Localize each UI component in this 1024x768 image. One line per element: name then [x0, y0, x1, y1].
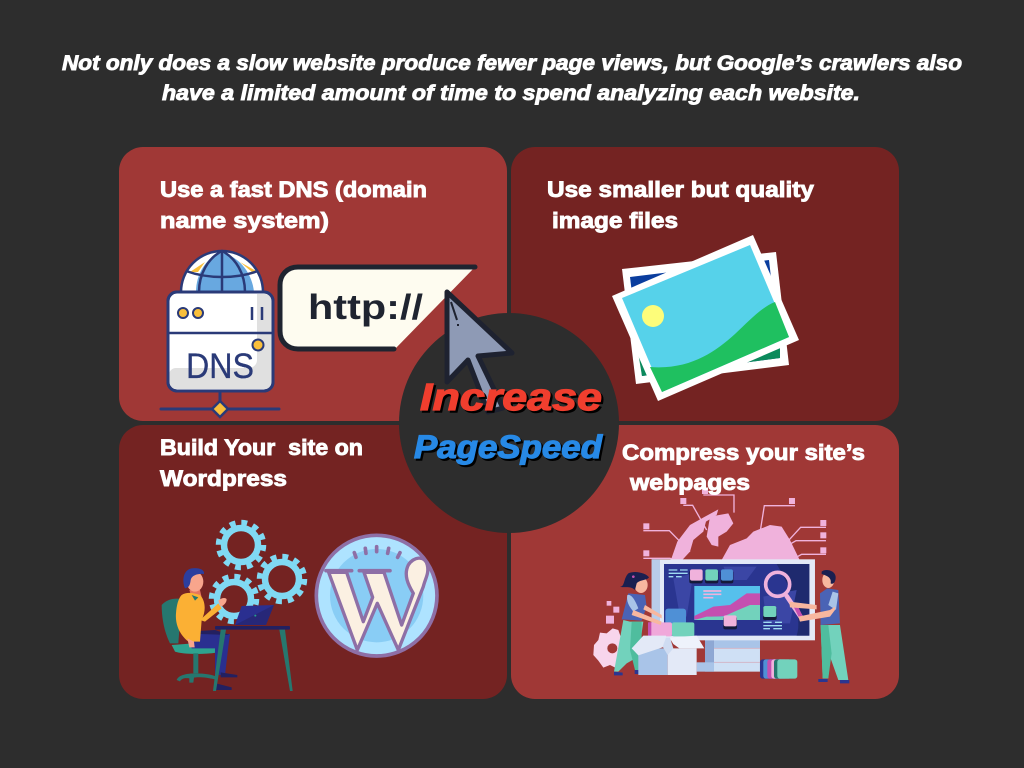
panel: image files [511, 147, 899, 421]
heading: image files: image files [552, 208, 678, 233]
heading: compress webpages [622, 440, 865, 495]
heading: image files [547, 177, 815, 233]
center badge [399, 292, 619, 533]
icon: stacked photos [612, 235, 799, 401]
label: Increase: Increase [420, 377, 602, 419]
label: PageSpeed: PageSpeed [416, 431, 606, 467]
heading: compress webpages: Compress your site’s [622, 440, 865, 465]
heading: Wordpress: Build Your site on [160, 435, 363, 460]
heading: Wordpress [160, 435, 363, 491]
label: PageSpeed: PageSpeed [414, 429, 604, 465]
heading: image files: Use smaller but quality [547, 177, 815, 202]
panel: Wordpress [119, 425, 507, 699]
panel: compress webpages [511, 425, 899, 699]
heading: fast DNS: Use a fast DNS (domain [160, 177, 427, 202]
heading: fast DNS [160, 177, 427, 233]
icon: http address bubble: http:// [308, 288, 423, 327]
header text: Not only does a slow website produce fewer page views, but Google’s crawlers also [62, 52, 962, 75]
icon: gears [212, 522, 304, 622]
icon: DNS server with globe: DNS [186, 347, 254, 386]
illustration: monitor, globe and two people [593, 488, 849, 683]
icon: cursor arrow [447, 292, 512, 412]
icon: http address bubble [280, 267, 475, 349]
label: Increase: Increase [422, 379, 604, 421]
heading: compress webpages: webpages [629, 470, 750, 495]
icon: Wordpress logo [316, 535, 437, 656]
header text: have a limited amount of time to spend analyzing each website. [162, 82, 860, 105]
icon: DNS server with globe [161, 251, 279, 417]
illustration: person at laptop [162, 568, 293, 691]
heading: fast DNS: name system) [160, 208, 329, 233]
header text [62, 52, 962, 105]
heading: Wordpress: Wordpress [160, 466, 287, 491]
panel: fast DNS [119, 147, 507, 421]
